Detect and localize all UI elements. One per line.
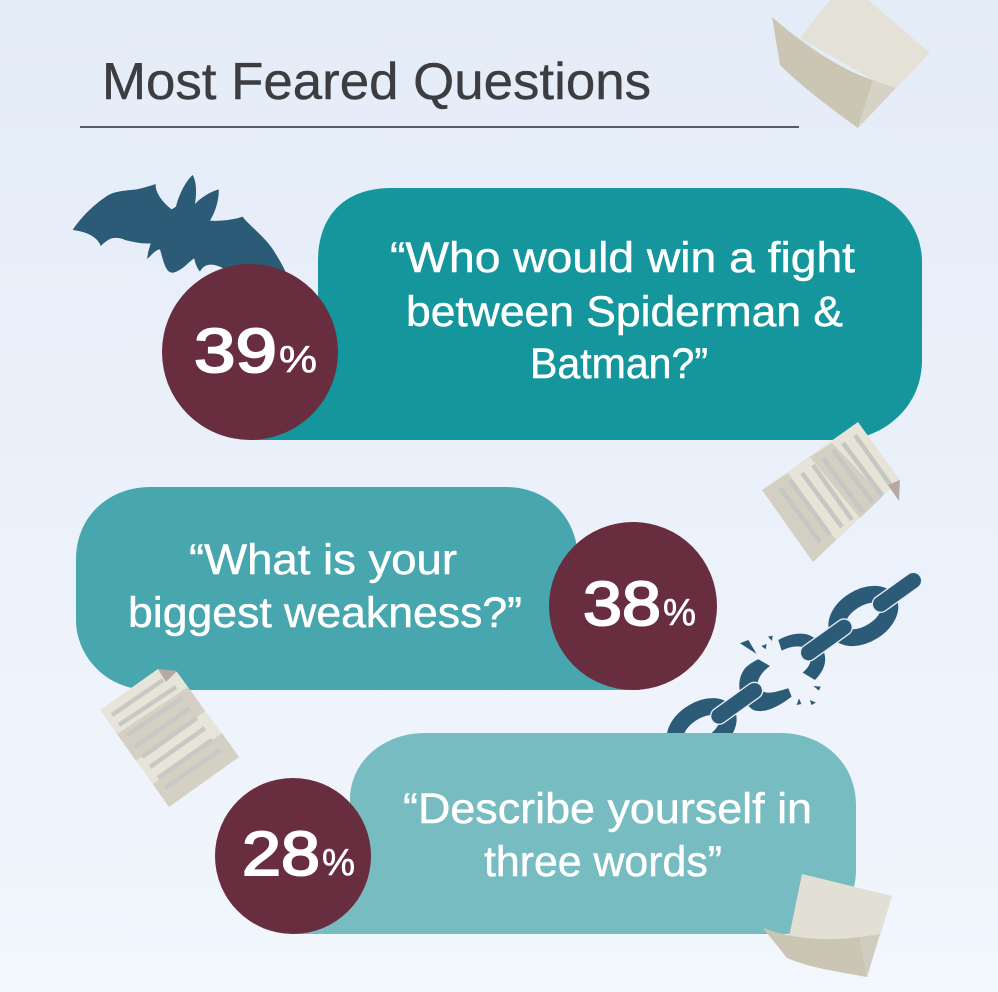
panel: question 3 bubble [293,733,856,934]
icon: bat [73,175,287,277]
percentage badge 28%: % [322,842,355,884]
question 3 text: “Describe yourself in [403,785,812,833]
question 2 text: “What is your [189,536,457,584]
icon: folded paper top right [772,0,930,128]
title underline [80,126,799,128]
percentage badge 28% [215,778,371,934]
percentage badge 39% [162,264,338,440]
question 2 text: biggest weakness?” [128,589,522,637]
percentage badge 39%: % [279,339,317,381]
panel: question 2 bubble [76,487,640,690]
icon: broken chain [667,581,913,759]
percentage badge 38%: 38 [583,570,661,639]
percentage badge 28%: 28 [242,820,320,889]
question 1 text: between Spiderman & [406,288,843,336]
question 1 text: Batman?” [530,340,708,388]
question 3 text: three words” [484,838,722,886]
question 1 text [390,234,855,388]
title: Most Feared Questions [102,53,651,111]
percentage badge 38% [549,522,717,690]
question 2 text [128,536,522,637]
icon: document left [100,669,239,807]
percentage badge 39%: 39 [194,317,277,386]
panel: question 1 bubble [250,188,922,440]
percentage badge 38%: % [663,592,696,634]
question 3 text [403,785,812,886]
question 1 text: “Who would win a fight [390,234,855,282]
icon: document right [762,422,900,562]
icon: folded paper bottom right [763,874,892,977]
